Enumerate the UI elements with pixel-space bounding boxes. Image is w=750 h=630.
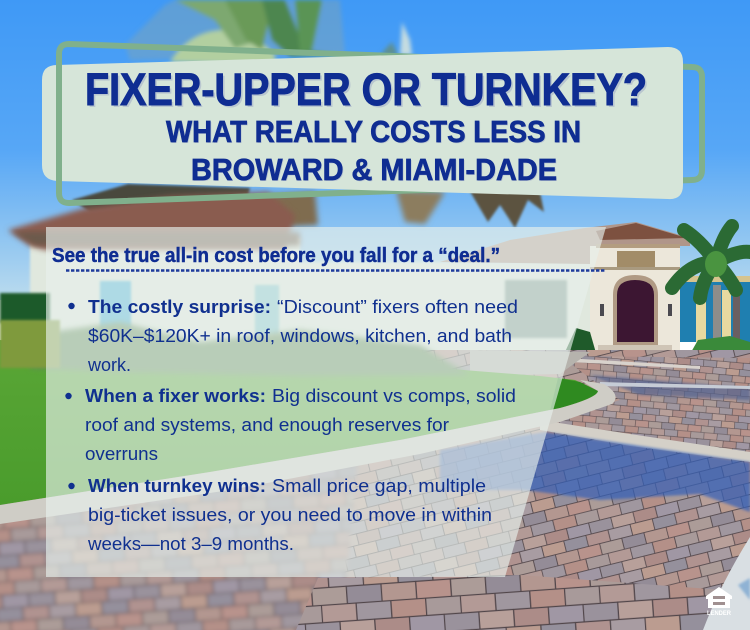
front entrance wall <box>590 246 680 351</box>
blurred palm at top <box>125 0 412 65</box>
main heading: FIXER-UPPER OR TURNKEY? <box>85 64 647 115</box>
subheading: BROWARD & MIAMI-DADE <box>191 153 557 187</box>
driveway base pavers <box>0 350 750 630</box>
subheading: WHAT REALLY COSTS LESS IN <box>167 116 582 150</box>
bullet: when a fixer works <box>65 386 516 464</box>
bullet: when turnkey wins: weeks—not 3–9 months. <box>87 534 294 554</box>
bullet: when a fixer works: roof and systems, and enough reserves for <box>85 415 449 435</box>
palm trees on the right <box>672 226 750 357</box>
far driveway pavers <box>545 356 750 460</box>
second curb <box>540 420 750 462</box>
bullet: when a fixer works: When a fixer works: <box>85 386 266 406</box>
bullet: when turnkey wins: Small price gap, multiple <box>272 476 486 496</box>
subheading <box>166 115 582 188</box>
subheading: WHAT REALLY COSTS LESS IN <box>166 115 581 149</box>
lawn <box>0 340 598 505</box>
right-hand tiled roof <box>440 222 690 264</box>
blurred palm fronds and trunks behind the title <box>72 184 544 228</box>
far driveway highlights and shadow <box>565 358 750 400</box>
bullet: the costly surprise: The costly surprise: <box>88 297 271 317</box>
green outline frame <box>59 44 702 203</box>
curb along lawn <box>0 380 616 524</box>
shrubs and hedges at far left <box>0 293 60 368</box>
shrubs by entrance <box>565 328 750 357</box>
main heading: FIXER-UPPER OR TURNKEY? <box>87 66 649 117</box>
equal housing lender mark <box>706 587 732 617</box>
bullet: when a fixer works: overruns <box>85 444 158 464</box>
panel shape <box>46 227 606 577</box>
blue shade across pavers <box>440 432 750 512</box>
green frame left edge over banner <box>56 60 62 185</box>
subheading: BROWARD & MIAMI-DADE <box>192 154 558 188</box>
cream banner shape <box>42 47 683 199</box>
dashed underline <box>66 269 606 272</box>
title banner <box>42 44 702 203</box>
front door <box>613 275 658 345</box>
bullet: the costly surprise: work. <box>87 355 131 375</box>
bullet: when turnkey wins <box>68 476 492 554</box>
panel heading: See the true all-in cost before you fall for a “deal.” <box>52 245 500 267</box>
pale walkway strip at lower right <box>703 537 750 630</box>
sky <box>0 0 750 300</box>
bullet: when turnkey wins: When turnkey wins: <box>88 476 266 496</box>
blurred foreground pavers at left <box>0 440 360 630</box>
right-hand windows <box>680 280 750 342</box>
trees and shrubs behind lawn <box>30 322 470 376</box>
windows behind panel <box>100 280 567 345</box>
bullet: when turnkey wins: big-ticket issues, or you need to move in within <box>88 505 492 525</box>
bullet: the costly surprise: $60K–$120K+ in roof, windows, kitchen, and bath <box>88 326 512 346</box>
concrete apron <box>470 350 590 376</box>
bullet: when a fixer works: Big discount vs comps, solid <box>272 386 516 406</box>
bullet: the costly surprise: “Discount” fixers often need <box>277 297 518 317</box>
blurred left roof <box>8 192 295 250</box>
bullet: the costly surprise <box>68 297 518 375</box>
near foreground pavers <box>296 575 724 630</box>
equal housing lender mark: LENDER <box>707 610 731 617</box>
bright lawn tip <box>550 378 598 411</box>
blurred house wall behind panel <box>30 235 600 352</box>
translucent content panel <box>46 227 606 577</box>
